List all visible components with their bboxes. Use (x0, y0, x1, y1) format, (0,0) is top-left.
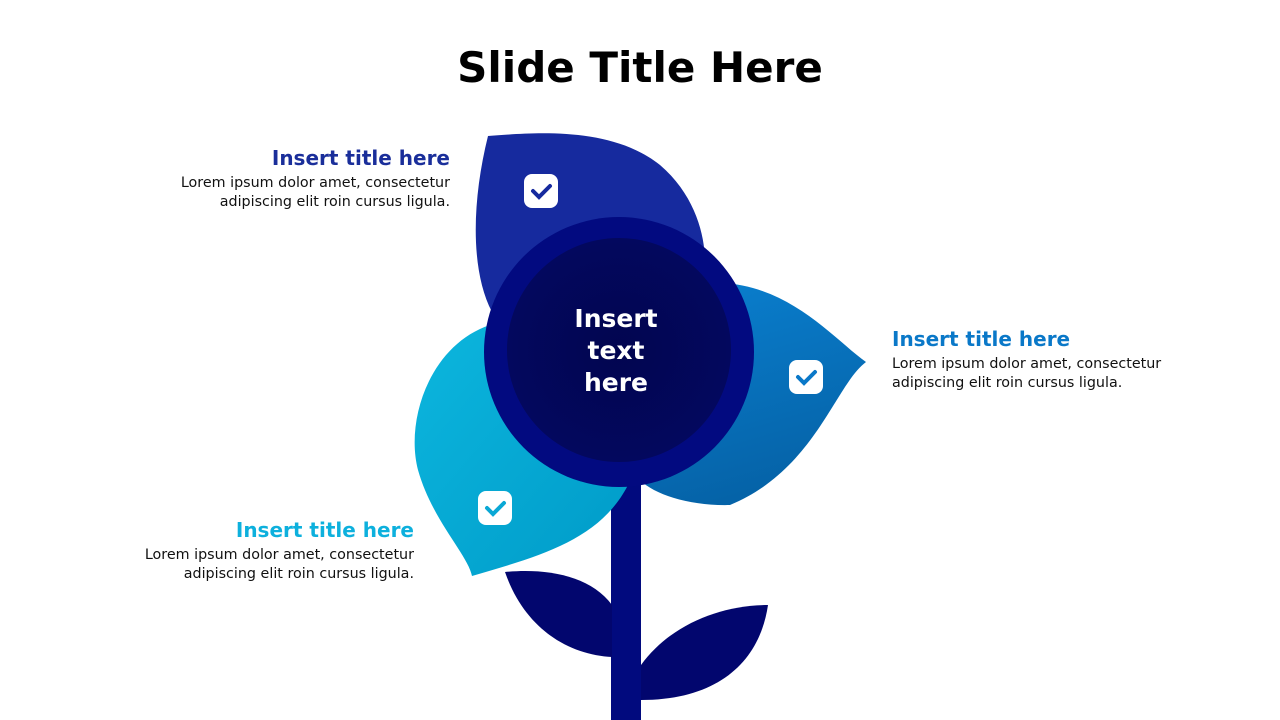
text block: bottom left (145, 518, 414, 582)
icon: check left (478, 491, 512, 525)
leaf right (640, 283, 866, 505)
text block: bottom left: Lorem ipsum dolor amet, consectetur (145, 547, 414, 563)
leaf top (476, 133, 705, 340)
icon: check top (524, 174, 558, 208)
leaf left (415, 325, 628, 576)
text block: right: Insert title here (892, 327, 1070, 351)
icon: check right (789, 360, 823, 394)
text block: right: adipiscing elit roin cursus ligula. (892, 375, 1122, 391)
text block: top left: Lorem ipsum dolor amet, consectetur (181, 175, 450, 191)
center circle (484, 217, 754, 487)
center circle: Insert (574, 304, 658, 333)
text block: right: Lorem ipsum dolor amet, consectetur (892, 356, 1161, 372)
center circle: text (588, 336, 645, 365)
stem (611, 470, 641, 720)
text block: right (892, 327, 1162, 391)
small leaf left (505, 571, 612, 657)
text block: bottom left: adipiscing elit roin cursus ligula. (184, 566, 414, 582)
title: Slide Title Here (457, 43, 823, 92)
text block: bottom left: Insert title here (236, 518, 414, 542)
text block: top left: Insert title here (272, 146, 450, 170)
text block: top left (181, 146, 450, 210)
center circle: here (584, 368, 648, 397)
text block: top left: adipiscing elit roin cursus ligula. (220, 194, 450, 210)
small leaf right (641, 605, 768, 700)
